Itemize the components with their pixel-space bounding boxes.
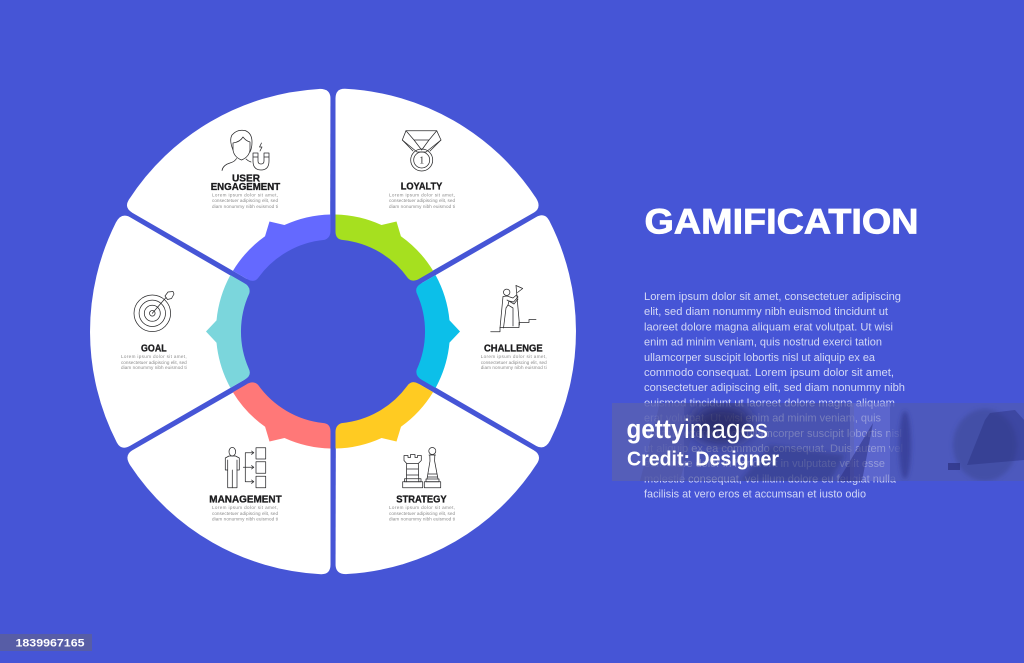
text: strategy description: consectetuer adipiscing elit, sed xyxy=(389,511,455,516)
watermark band xyxy=(612,403,1024,481)
body text: ut aliquip ex ea commodo consequat. Duis autem vel xyxy=(644,443,903,455)
panel: management segment xyxy=(127,336,330,574)
label: goal: GOAL xyxy=(141,343,167,354)
text: goal description xyxy=(121,354,187,370)
text: goal description: diam nonummy nibh euismod ti xyxy=(121,365,187,370)
body text: commodo consequat. Lorem ipsum dolor sit amet, xyxy=(644,367,894,379)
text: challenge description: consectetuer adipiscing elit, sed xyxy=(481,360,547,365)
ring arrow: management coral xyxy=(233,382,330,448)
ring arrow: strategy yellow xyxy=(327,359,433,477)
label: management: MANAGEMENT xyxy=(209,494,282,506)
text: strategy description xyxy=(389,505,455,522)
body text xyxy=(644,291,905,501)
text: management description xyxy=(212,505,278,522)
ring arrow: loyalty green xyxy=(336,214,433,281)
ring arrow: challenge cyan xyxy=(378,275,484,393)
ring arrow: user engagement violet xyxy=(233,186,339,304)
text: loyalty description: Lorem ipsum dolor sit amet, xyxy=(389,192,455,198)
hub background xyxy=(232,230,434,432)
icon: manager with org boxes xyxy=(225,447,266,488)
body text: euismod tincidunt ut laoreet dolore magna aliquam xyxy=(644,397,895,409)
label: challenge: CHALLENGE xyxy=(484,343,543,354)
label: loyalty: LOYALTY xyxy=(401,182,443,192)
body text: enim ad minim veniam, quis nostrud exerci tation xyxy=(644,337,882,349)
icon: person with magnet xyxy=(222,130,269,170)
text: user engagement description: consectetuer adipiscing elit, sed xyxy=(212,198,278,203)
body text: elit, sed diam nonummy nibh euismod tincidunt ut xyxy=(644,306,888,318)
watermark: credit: Credit: Designer xyxy=(627,448,779,470)
body text: nostrud exerci tation ullamcorper suscipit lobortis nisl xyxy=(644,428,902,440)
icon: medal xyxy=(402,131,441,171)
panel: user engagement segment xyxy=(124,32,431,327)
body text: consectetuer adipiscing elit, sed diam nonummy nibh xyxy=(644,382,905,394)
circular diagram xyxy=(20,32,646,631)
text: challenge description: diam nonummy nibh euismod ti xyxy=(481,365,547,370)
label: user engagement: ENGAGEMENT xyxy=(211,182,280,193)
text: user engagement description: diam nonummy nibh euismod ti xyxy=(212,204,278,209)
body text: facilisis at vero eros et accumsan et iusto odio xyxy=(644,489,866,501)
body text: erat volutpat. Ut wisi enim ad minim veniam, quis xyxy=(644,413,881,425)
body text: Lorem ipsum dolor sit amet, consectetuer adipiscing xyxy=(644,291,901,303)
text: strategy description: Lorem ipsum dolor sit amet, xyxy=(389,505,455,510)
panel: loyalty segment xyxy=(336,89,539,326)
label: user engagement: USER xyxy=(232,173,260,184)
ring arrow: goal teal xyxy=(182,270,288,388)
title: GAMIFICATION xyxy=(644,202,918,242)
text: loyalty description xyxy=(389,192,455,209)
text: goal description: Lorem ipsum dolor sit amet, xyxy=(121,354,187,359)
watermark: getty images logo: images xyxy=(684,414,768,444)
text: user engagement description: Lorem ipsum dolor sit amet, xyxy=(212,192,278,198)
text: management description: consectetuer adipiscing elit, sed xyxy=(212,511,278,516)
text: strategy description: diam nonummy nibh euismod ti xyxy=(389,516,455,522)
text: challenge description: Lorem ipsum dolor sit amet, xyxy=(481,354,547,359)
body text: ullamcorper suscipit lobortis nisl ut aliquip ex ea xyxy=(644,352,876,364)
icon: target with arrow xyxy=(134,292,174,332)
label: user engagement xyxy=(211,173,280,193)
image id tag xyxy=(0,634,92,651)
body text: laoreet dolore magna aliquam erat volutpat. Ut wisi xyxy=(644,321,893,333)
panel: challenge segment xyxy=(339,212,646,507)
text: challenge description xyxy=(481,354,547,370)
text: management description: diam nonummy nibh euismod ti xyxy=(212,516,278,522)
text: loyalty description: diam nonummy nibh euismod ti xyxy=(389,204,455,209)
text: loyalty description: consectetuer adipiscing elit, sed xyxy=(389,198,455,203)
panel: strategy segment xyxy=(235,336,542,631)
body text: eum iriure dolor in hendrerit in vulputate velit esse xyxy=(644,458,885,470)
panel: goal segment xyxy=(20,156,327,451)
text: management description: Lorem ipsum dolor sit amet, xyxy=(212,505,278,510)
icon: chess pieces xyxy=(403,448,441,488)
text: goal description: consectetuer adipiscing elit, sed xyxy=(121,360,187,365)
icon: climber with flag xyxy=(491,286,536,332)
image id tag: 1839967165 xyxy=(16,638,84,650)
text: user engagement description xyxy=(212,192,278,209)
label: strategy: STRATEGY xyxy=(396,494,447,506)
body text: molestie consequat, vel illum dolore eu feugiat nulla xyxy=(644,473,897,485)
icon: medal: 1 xyxy=(419,156,424,166)
watermark: getty images logo xyxy=(626,414,768,444)
watermark: getty images logo: getty xyxy=(626,414,684,444)
